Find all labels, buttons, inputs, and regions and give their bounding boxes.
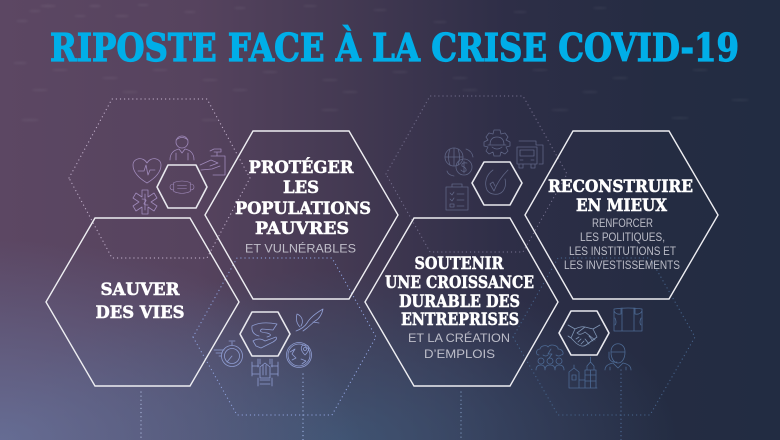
panel: soutenir une croissance durable: D’EMPLOIS [424, 347, 495, 361]
panel: sauver des vies [46, 218, 239, 386]
icon: gear and helmet [484, 130, 510, 156]
icon group: populations [214, 309, 323, 386]
panel: reconstruire en mieux: RECONSTRUIRE [548, 177, 693, 197]
icon: truck [517, 141, 543, 168]
panel: reconstruire en mieux [525, 131, 718, 299]
panel: protéger les populations pauvres: PROTÉGER [248, 157, 354, 178]
icon: heart [133, 159, 161, 183]
panel: protéger les populations pauvres: PAUVRES [255, 219, 349, 239]
icon group: santé [133, 136, 225, 214]
icon: city [569, 357, 597, 388]
panel: soutenir une croissance durable: ET LA CRÉATION [408, 330, 510, 345]
icon: medical star [133, 190, 157, 214]
icon: teamwork [252, 359, 278, 386]
panel: soutenir une croissance durable: DURABLE DES [399, 292, 520, 312]
icon: globe and pin [286, 342, 312, 368]
icon: support agent [605, 344, 631, 370]
dotted hexagons and connectors [69, 96, 695, 440]
panel: soutenir une croissance durable [365, 218, 558, 386]
panel: reconstruire en mieux: EN MIEUX [576, 196, 668, 216]
icon: doctor [170, 136, 194, 160]
icon: sanitizer [200, 149, 225, 175]
icon: hands and money [252, 323, 277, 348]
panel: protéger les populations pauvres: POPULATIONS [235, 199, 371, 219]
panel: sauver des vies: DES VIES [96, 303, 184, 323]
icon: box [614, 308, 642, 331]
icon: globe and dollar [445, 148, 473, 176]
panel: reconstruire en mieux: LES INSTITUTIONS ET [569, 244, 677, 258]
panel: reconstruire en mieux: LES POLITIQUES, [580, 230, 665, 244]
icon: check leaf [486, 170, 508, 194]
panel: sauver des vies: SAUVER [100, 280, 180, 300]
panel: soutenir une croissance durable: SOUTENIR [414, 254, 504, 274]
icon group: entreprises [445, 130, 543, 210]
panel: soutenir une croissance durable: ENTREPRISES [401, 310, 519, 330]
panel: reconstruire en mieux: LES INVESTISSEMENTS [564, 258, 680, 272]
panel: protéger les populations pauvres: LES [283, 178, 319, 198]
icon: storm and people [536, 345, 564, 370]
icon: clipboard [446, 184, 468, 210]
panel: soutenir une croissance durable: UNE CROISSANCE [385, 273, 534, 293]
icon: handshake [568, 325, 600, 346]
icon: mask [170, 181, 194, 193]
icon group: reconstruire [536, 308, 642, 388]
panel: protéger les populations pauvres [205, 131, 398, 299]
panel: reconstruire en mieux: RENFORCER [592, 216, 653, 230]
icon: stopwatch [214, 341, 242, 366]
panel: protéger les populations pauvres: ET VULNÉRABLES [245, 240, 356, 256]
icon: plant [296, 309, 323, 331]
